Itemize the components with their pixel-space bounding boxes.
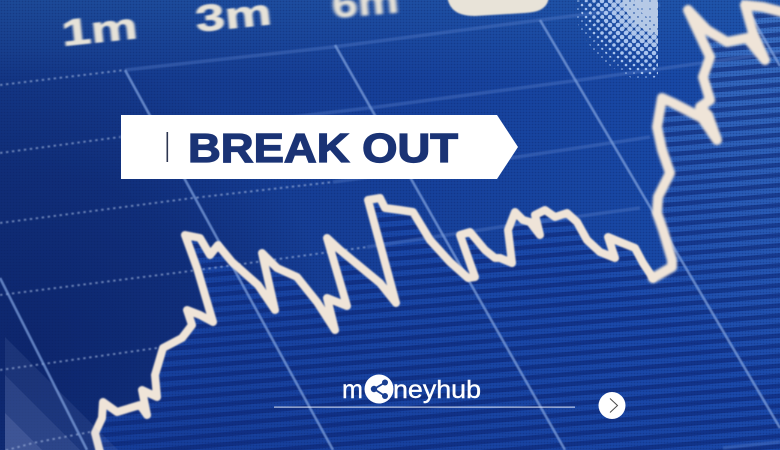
- banner separator: [166, 132, 168, 162]
- halftone dot decoration: [577, 0, 658, 78]
- moneyhub logo: [342, 374, 481, 404]
- title banner: [121, 115, 518, 179]
- banner arrow shape: [121, 115, 518, 179]
- corner triangle overlay: [5, 337, 118, 450]
- logo letter m: m: [342, 374, 363, 404]
- timeframe label: 1m: 1m: [60, 5, 139, 54]
- logo share icon: [364, 374, 394, 404]
- next arrow button: [598, 392, 626, 419]
- logo letters neyhub: neyhub: [393, 376, 481, 404]
- timeframe pill button: [447, 0, 549, 16]
- title text: BREAK OUT: [188, 125, 458, 171]
- footer rule: [274, 407, 575, 408]
